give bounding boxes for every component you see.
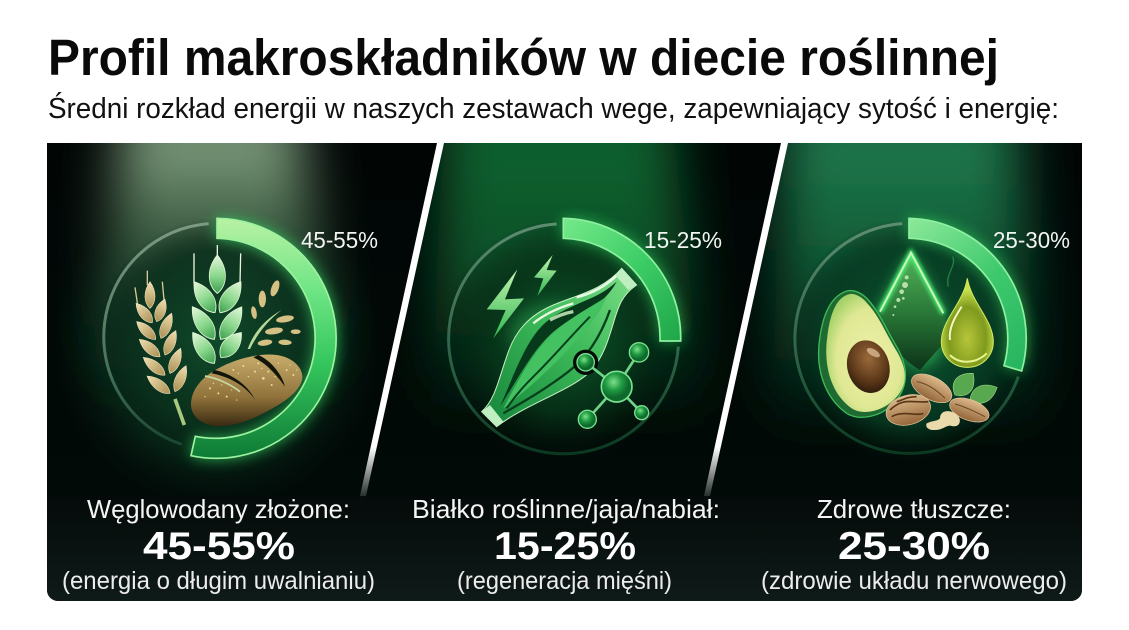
caption: carbohydrates: (energia o długim uwalnianiu) — [62, 567, 375, 595]
caption: fats — [761, 494, 1067, 595]
diagonal divider right — [702, 143, 788, 505]
ring gauge 45-55% — [104, 218, 336, 458]
caption: fats: (zdrowie układu nerwowego) — [761, 567, 1067, 595]
spotlight protein — [430, 100, 705, 462]
caption: protein — [412, 494, 720, 595]
icon: green glowing leaf shape — [878, 252, 954, 370]
icon: muscle — [482, 268, 637, 427]
spotlight fats — [770, 100, 1040, 462]
icon: wheat ear — [132, 271, 191, 425]
caption: carbohydrates — [62, 494, 375, 595]
icon: green grain plant — [192, 245, 242, 364]
caption: protein: Białko roślinne/jaja/nabiał: — [412, 494, 720, 524]
spotlight carbohydrates — [67, 143, 366, 484]
icon: wheat, leaves and bread — [132, 245, 302, 426]
icon: bread loaf — [191, 355, 302, 426]
caption: carbohydrates: Węglowodany złożone: — [87, 494, 350, 524]
icon: lightning bolts — [487, 255, 557, 338]
ring gauge 25-30% — [795, 218, 1026, 453]
panel: healthy fats — [770, 100, 1070, 462]
panel: complex carbohydrates — [67, 143, 378, 484]
icon: muscle, bolts and molecule — [482, 255, 649, 428]
icon: oil drop — [941, 278, 993, 367]
diagonal divider left — [358, 143, 444, 505]
ring gauge 15-25% — [449, 218, 681, 454]
caption: fats: Zdrowe tłuszcze: — [817, 494, 1011, 524]
caption: protein: (regeneracja mięśni) — [457, 567, 672, 595]
caption: fats: 25-30% — [838, 525, 990, 568]
panel: plant protein — [430, 100, 722, 462]
icon: molecule — [573, 343, 649, 428]
subtitle: Średni rozkład energii w naszych zestawach wege, zapewniający sytość i energię: — [48, 91, 1059, 125]
donut label 45-55%: 45-55% — [301, 227, 378, 253]
caption: protein: 15-25% — [494, 525, 636, 568]
icon: avocado, oil and nuts — [819, 252, 1001, 430]
icon: leaves — [952, 373, 998, 404]
icon: nuts — [886, 374, 990, 430]
donut label 15-25%: 15-25% — [644, 227, 722, 253]
donut label 25-30%: 25-30% — [993, 227, 1070, 253]
caption band — [47, 496, 1082, 601]
caption: carbohydrates: 45-55% — [143, 525, 295, 568]
icon: avocado half — [819, 291, 905, 417]
title: Profil makroskładników w diecie roślinnej — [48, 29, 999, 86]
icon: seeds — [248, 279, 301, 349]
infographic panel — [47, 100, 1082, 601]
